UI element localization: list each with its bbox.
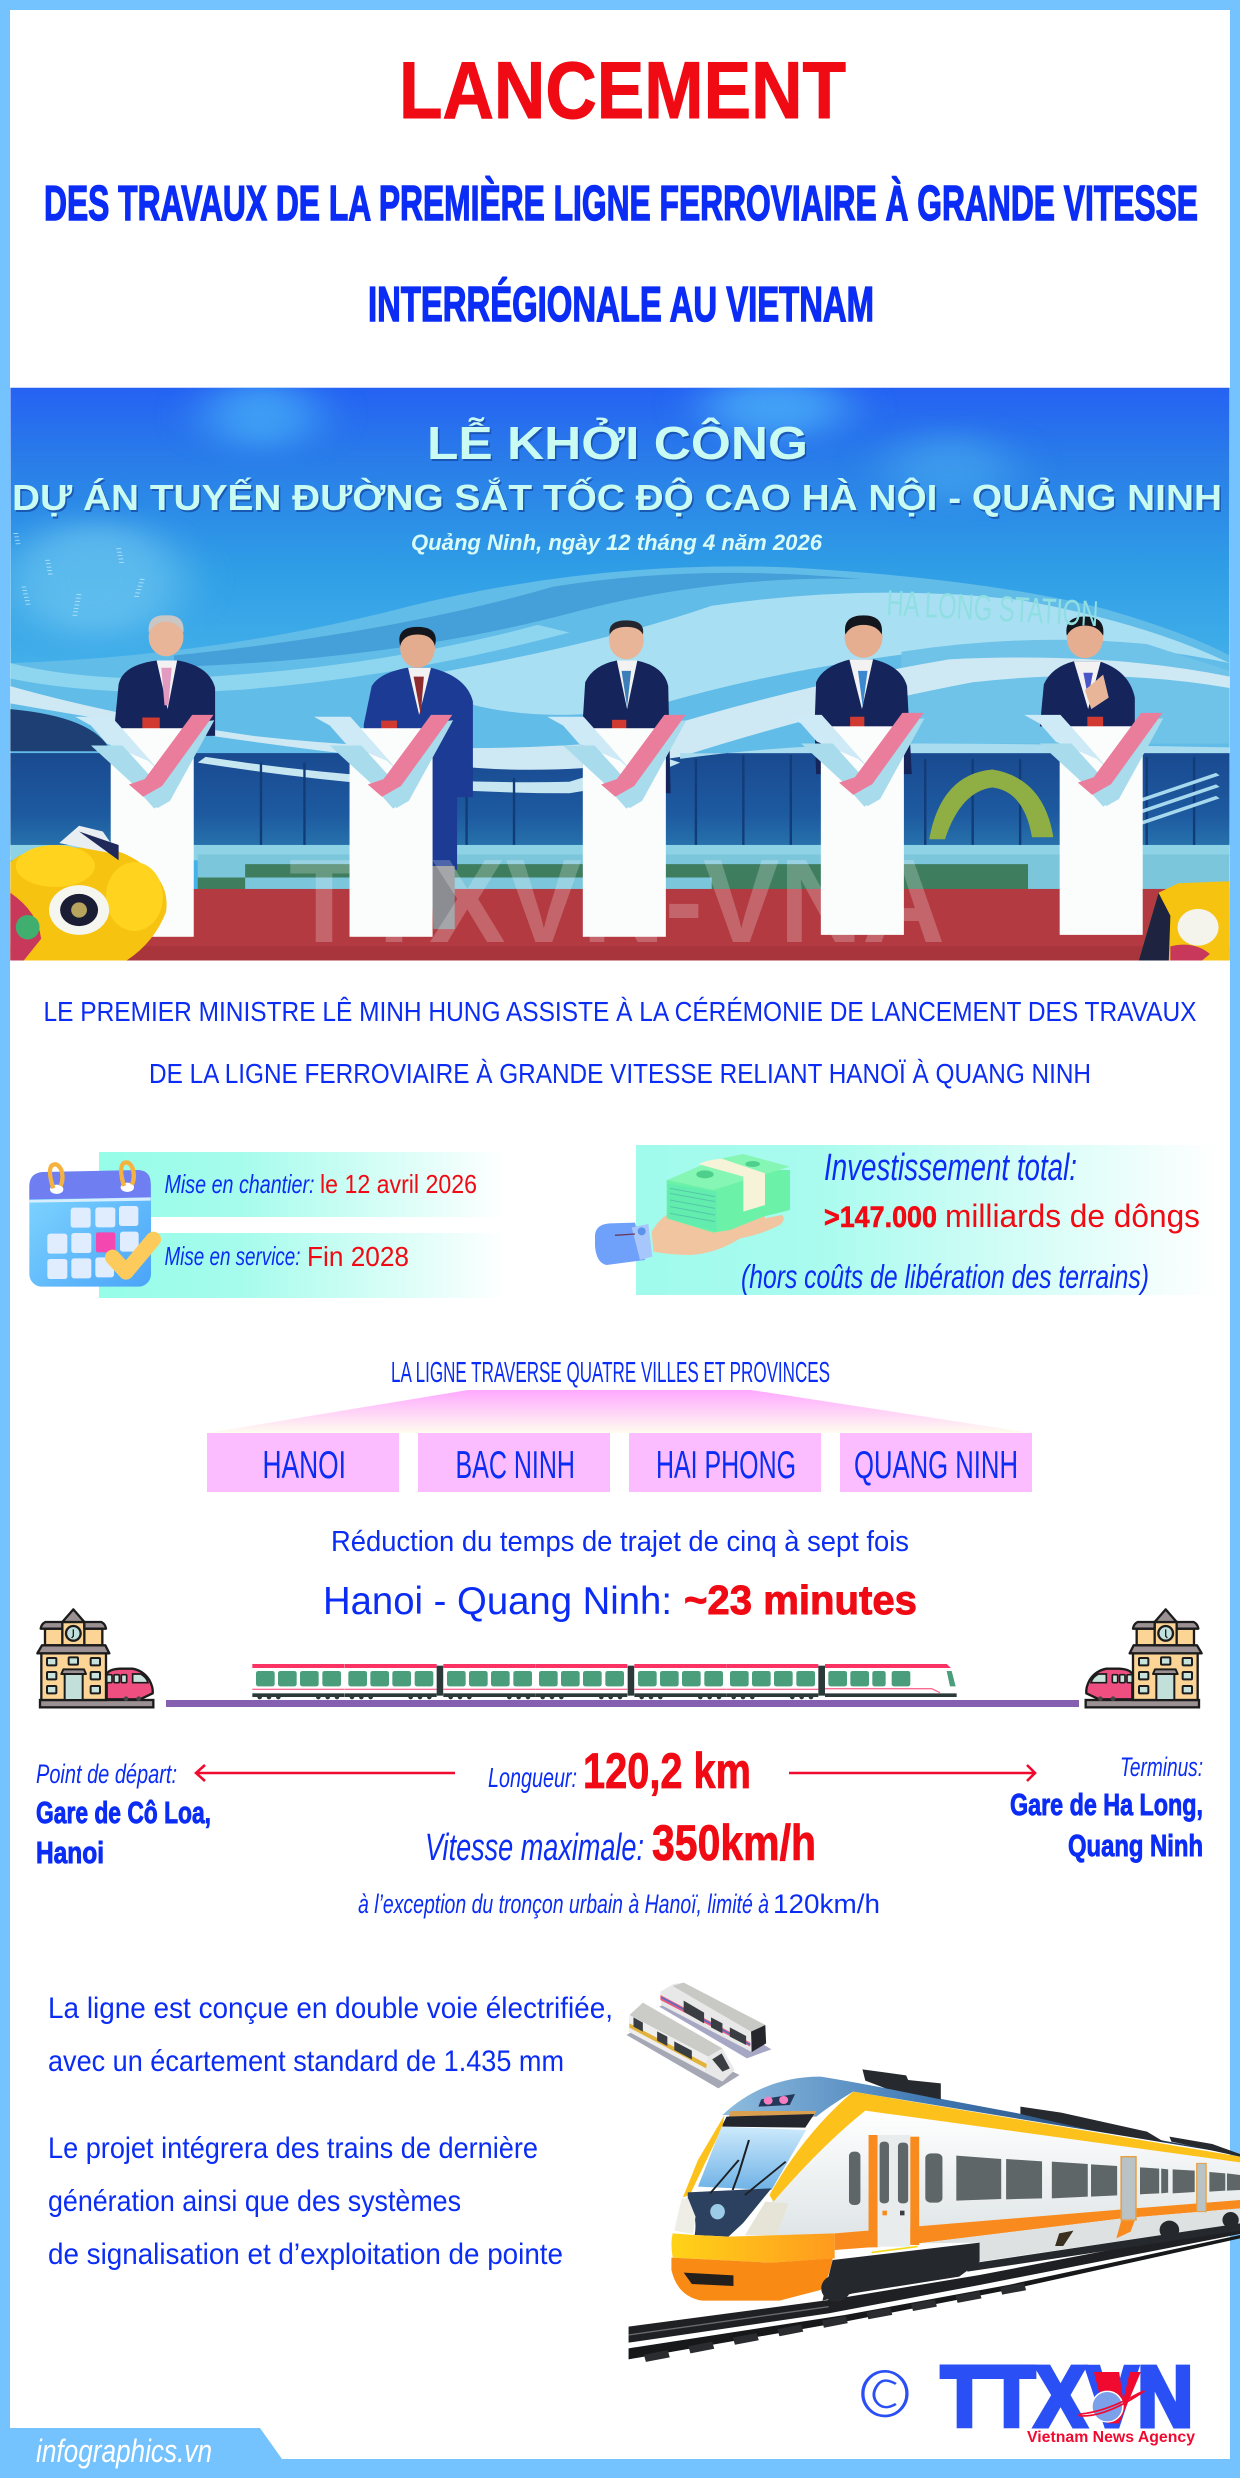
photo heading text: Quảng Ninh, ngày 12 tháng 4 năm 2026 (411, 530, 823, 555)
photo heading text (12, 417, 1224, 634)
city: Quang Ninh (840, 1433, 1032, 1492)
person five (1040, 616, 1135, 727)
max speed (425, 1815, 816, 1871)
terminus (1010, 1752, 1203, 1863)
nose lower (671, 2233, 835, 2263)
panel: schedule (29, 1152, 506, 1298)
terminus: Terminus: (1120, 1752, 1203, 1782)
title (44, 46, 1198, 332)
person three (582, 620, 671, 793)
departure: Hanoi (36, 1835, 104, 1870)
departure: Gare de Cô Loa, (36, 1795, 211, 1830)
panel: schedule: le 12 avril 2026 (320, 1169, 477, 1199)
logo: TTXVN: Vietnam News Agency (1027, 2429, 1195, 2446)
travel time (323, 1526, 917, 1623)
panel: investment: Investissement total: (824, 1147, 1077, 1189)
photo heading text: LỄ KHỞI CÔNG (428, 419, 810, 471)
lion mascot left (10, 826, 167, 961)
copyright symbol (863, 2371, 907, 2416)
doors (869, 2135, 1206, 2253)
panel: schedule: Mise en service: (164, 1241, 300, 1271)
icon: departure station (37, 1609, 153, 1707)
city: Bac Ninh (418, 1433, 610, 1492)
max speed: Vitesse maximale: (425, 1827, 644, 1869)
photo heading text: DỰ ÁN TUYẾN ĐƯỜNG SẮT TỐC ĐỘ CAO HÀ NỘI - QUẢNG NINH (12, 476, 1222, 518)
body side (771, 2110, 1240, 2237)
person one (115, 615, 215, 736)
city: Hai Phong (629, 1433, 821, 1492)
city: Hai Phong: HAI PHONG (656, 1444, 796, 1487)
text block: technical details: avec un écartement standard de 1.435 mm (48, 2045, 564, 2078)
text block: technical details (48, 1992, 613, 2271)
city: Hanoi (207, 1433, 399, 1492)
caption (44, 996, 1197, 1089)
icon: hand with money (595, 1154, 790, 1265)
panel: investment: milliards de dôngs (945, 1198, 1200, 1234)
cab (674, 2094, 816, 2237)
undercarriage (821, 2212, 1240, 2302)
panel: cities: LA LIGNE TRAVERSE QUATRE VILLES ET PROVINCES (391, 1357, 830, 1389)
speed note: à l’exception du tronçon urbain à Hanoï, limité à (358, 1889, 769, 1919)
logo: TTXVN: TTXVN (941, 2350, 1193, 2445)
city: Bac Ninh: BAC NINH (456, 1444, 575, 1487)
track bar (166, 1700, 1079, 1707)
caption: DE LA LIGNE FERROVIAIRE À GRANDE VITESSE RELIANT HANOÏ À QUANG NINH (149, 1058, 1091, 1089)
text block: technical details: La ligne est conçue en double voie électrifiée, (48, 1992, 613, 2025)
rails (629, 2225, 1240, 2359)
city: Quang Ninh: QUANG NINH (854, 1444, 1018, 1487)
lion mascot right (1139, 881, 1230, 961)
logo: red V and globe (1079, 2372, 1144, 2423)
yellow band (769, 2092, 1240, 2202)
departure: Point de départ: (36, 1759, 177, 1789)
speed note: 120km/h (773, 1889, 880, 1919)
person four (815, 615, 912, 774)
panel: cities (207, 1357, 1032, 1492)
icon: calendar (29, 1162, 153, 1287)
text block: technical details: génération ainsi que des systèmes (48, 2185, 461, 2218)
panel: schedule: Fin 2028 (307, 1241, 409, 1272)
stripe and skirt (835, 2200, 1240, 2250)
windows (849, 2152, 1240, 2205)
photo watermark: TTXVN-VNA (289, 835, 945, 968)
illustration: small metro trains (627, 1983, 771, 2088)
title: main word: LANCEMENT (399, 46, 846, 136)
panel: schedule: Mise en chantier: (164, 1169, 314, 1199)
photo heading text: HA LONG STATION (886, 582, 1099, 634)
arrow: right (789, 1765, 1035, 1781)
arrow: left (196, 1765, 455, 1781)
route details (36, 1743, 1203, 1919)
roof equipment (862, 2069, 1240, 2157)
departure (36, 1759, 211, 1870)
panel: ceremony photo (8, 376, 1230, 968)
length: 120,2 km (583, 1743, 751, 1799)
footer tab: infographics.vn (36, 2433, 212, 2469)
illustration: high-speed train (629, 2069, 1240, 2359)
lectern logos (75, 713, 1163, 937)
max speed: 350km/h (652, 1815, 816, 1871)
panel: investment: >147.000 (824, 1201, 937, 1234)
roof (722, 2077, 1240, 2155)
terminus: Quang Ninh (1068, 1828, 1203, 1863)
icon: terminus station (1086, 1609, 1202, 1707)
length (488, 1743, 751, 1799)
train illustration (252, 1664, 957, 1699)
city: Hanoi: HANOI (262, 1444, 346, 1487)
photo heading text: DỰ ÁN TUYẾN ĐƯỜNG SẮT TỐC ĐỘ CAO HÀ NỘI - QUẢNG NINH (14, 478, 1224, 520)
text block: technical details: Le projet intégrera des trains de dernière (48, 2132, 538, 2165)
title: line three: INTERRÉGIONALE AU VIETNAM (368, 278, 874, 332)
travel time: Hanoi - Quang Ninh: (323, 1580, 672, 1623)
person two (364, 627, 473, 929)
panel: investment (595, 1145, 1222, 1295)
footer tab (0, 2428, 1240, 2478)
photo heading text: LỄ KHỞI CÔNG (427, 417, 808, 469)
travel time: Réduction du temps de trajet de cinq à sept fois (331, 1526, 909, 1558)
travel time: ~23 minutes (684, 1577, 917, 1623)
length: Longueur: (488, 1762, 577, 1793)
text block: technical details: de signalisation et d’exploitation de pointe (48, 2238, 563, 2271)
